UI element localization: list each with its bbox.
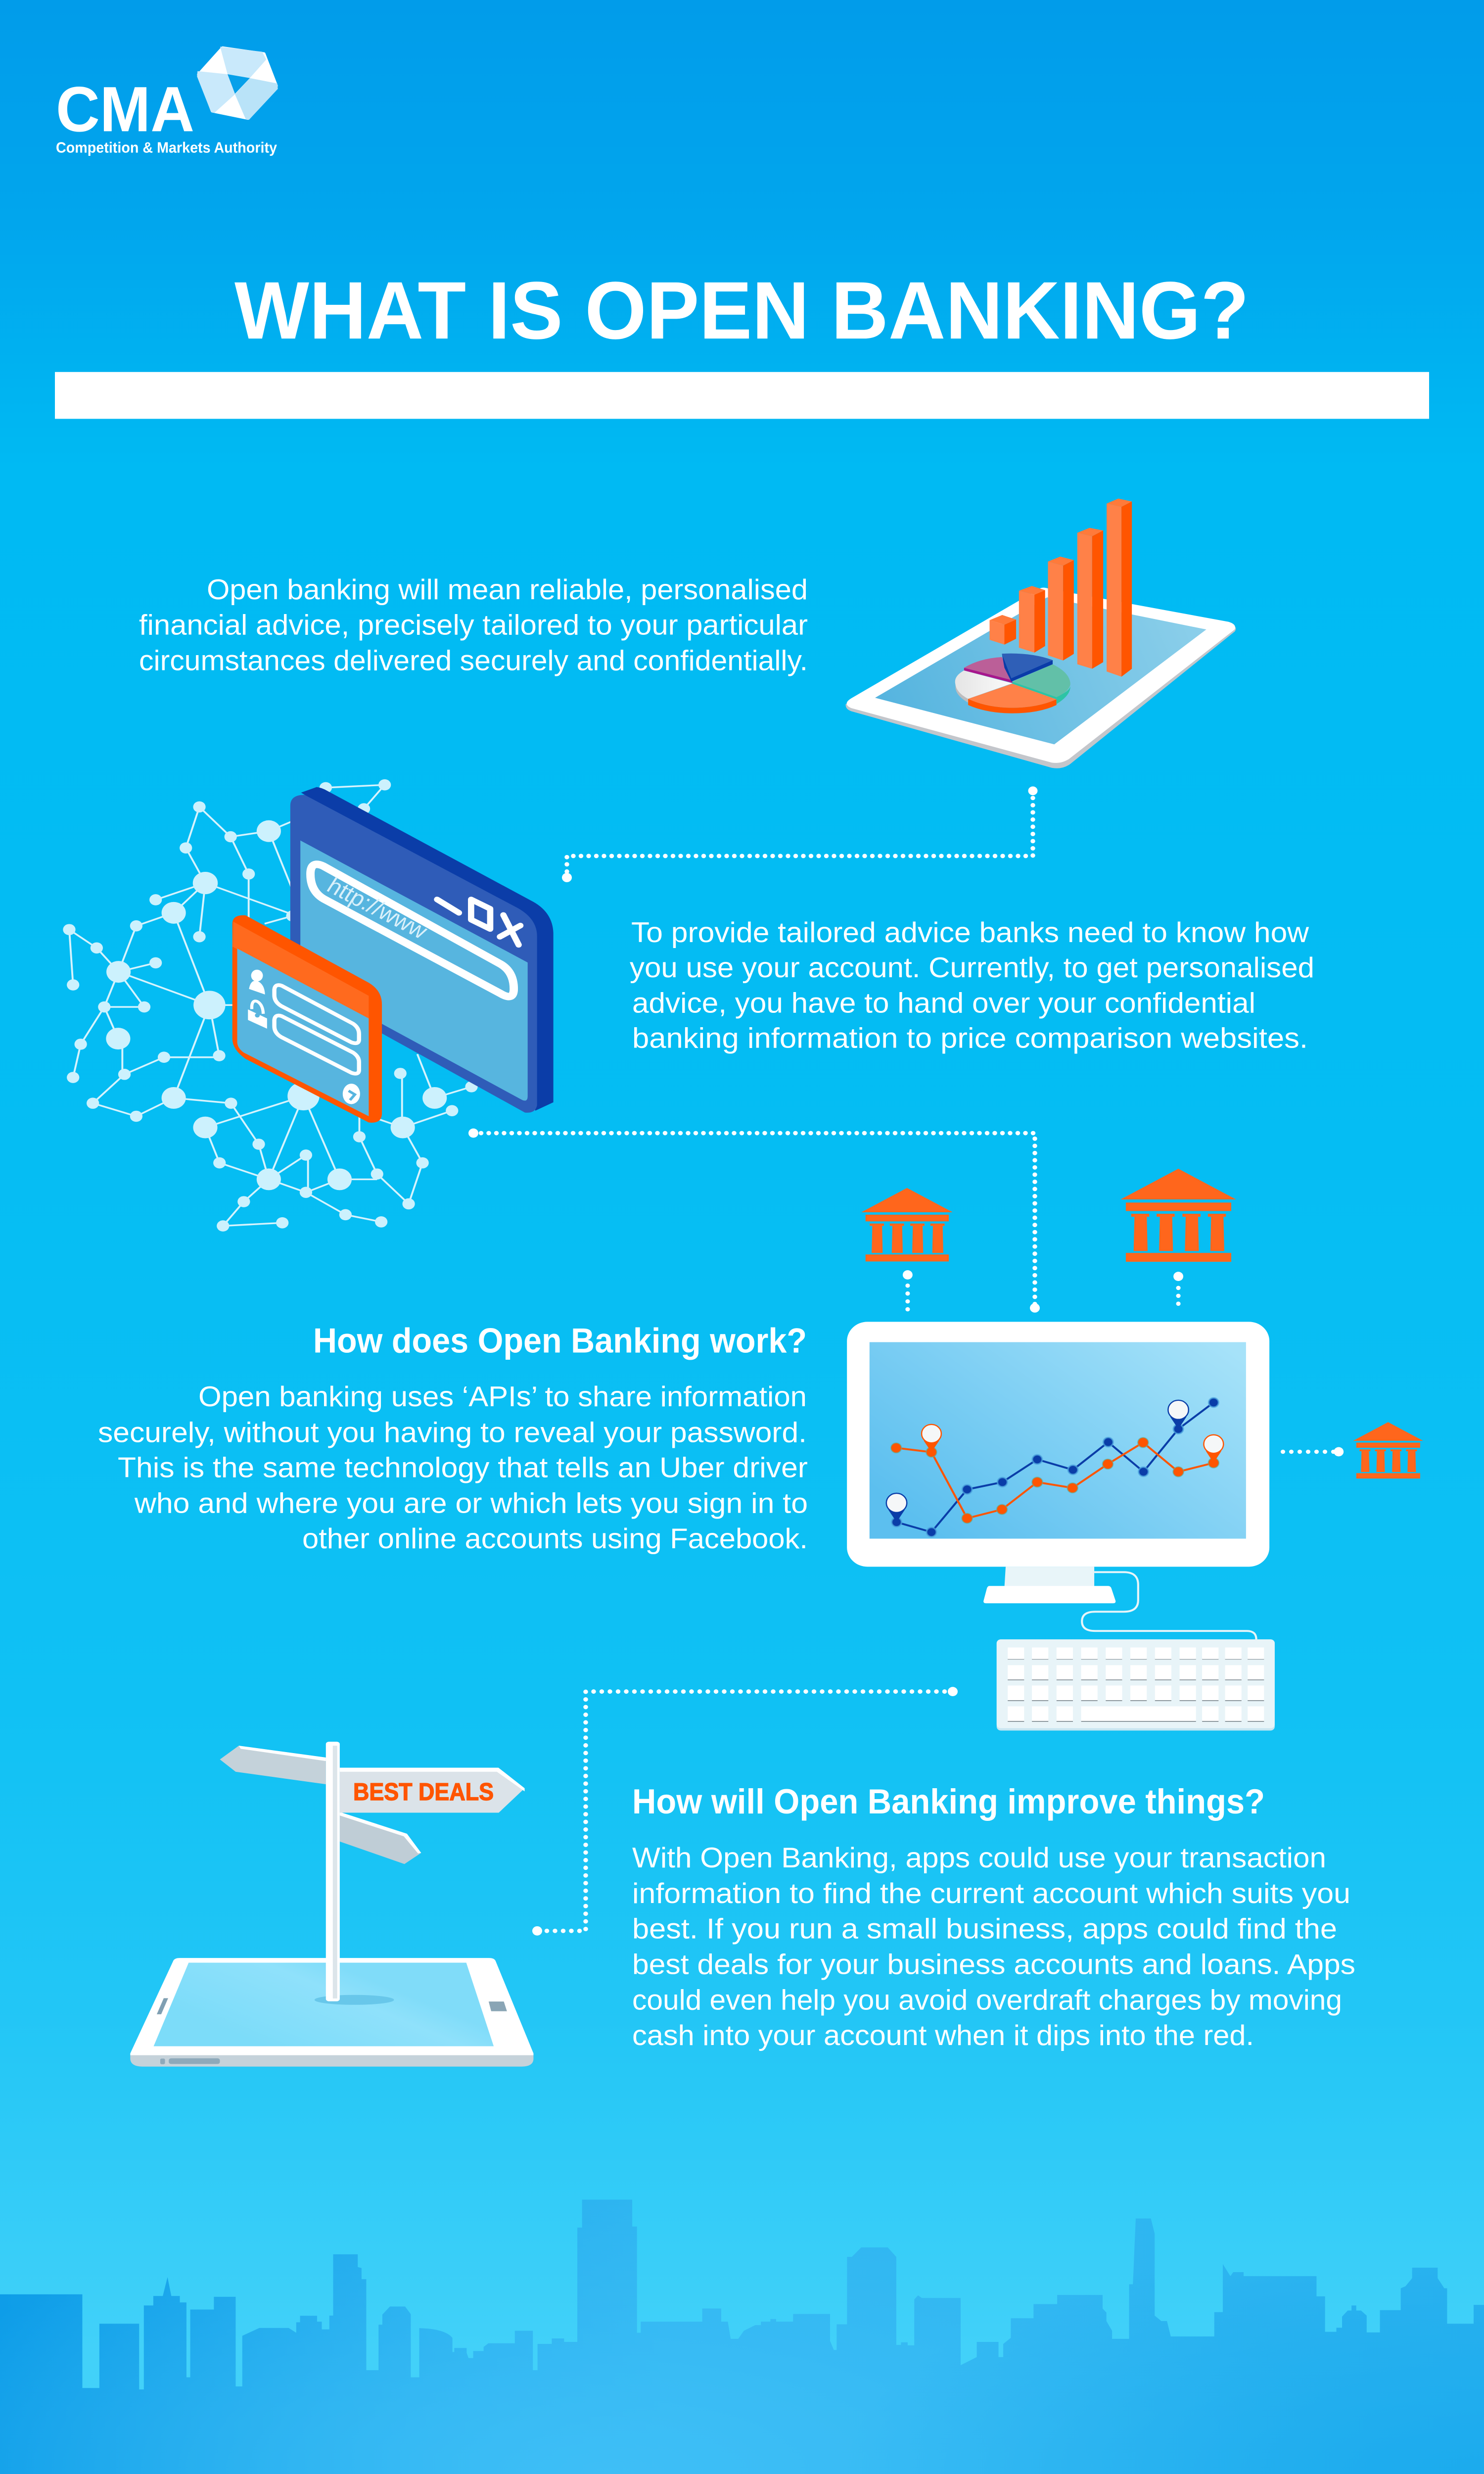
text block: tailored advice: advice, you have to hand over your confidential — [632, 987, 1255, 1019]
title: WHAT IS OPEN BANKING? — [234, 265, 1249, 356]
body copy: cash into your account when it dips into the red. — [632, 2019, 1254, 2051]
illustration: signpost on tablet — [130, 1742, 533, 2067]
keyboard cable — [1082, 1572, 1256, 1639]
text block: tailored advice — [630, 916, 1314, 1054]
post — [326, 1742, 340, 2001]
body copy: other online accounts using Facebook. — [302, 1522, 808, 1555]
heading: How does Open Banking work? — [313, 1322, 807, 1360]
tablet body — [846, 588, 1236, 768]
body copy: Open banking uses ‘APIs’ to share information — [198, 1380, 807, 1413]
address bar — [311, 864, 514, 997]
monitor — [847, 1322, 1269, 1603]
text block: how will open banking improve things — [632, 1782, 1355, 2051]
body copy — [632, 1842, 1355, 2051]
left sign — [220, 1746, 326, 1784]
orange login window — [232, 915, 382, 1123]
dotted connector: keyboard to signpost — [532, 1687, 958, 1936]
window controls — [437, 900, 520, 945]
body copy: information to find the current account which suits you — [632, 1877, 1350, 1909]
text block: tailored advice: you use your account. Currently, to get personalised — [630, 952, 1314, 984]
body copy — [98, 1380, 808, 1555]
dotted connector: tablet to browser — [562, 786, 1038, 882]
keyboard — [997, 1639, 1275, 1730]
illustration: network and browser windows — [63, 779, 554, 1232]
lock icon — [248, 1001, 267, 1029]
logo hexagon mark — [197, 47, 278, 120]
illustration: monitor, banks and keyboard — [847, 1169, 1423, 1730]
text block: tailored advice: banking information to price comparison websites. — [632, 1022, 1308, 1054]
body copy: best deals for your business accounts and loans. Apps — [632, 1948, 1355, 1980]
pie chart — [955, 654, 1070, 714]
dotted connector: browser to monitor — [468, 1129, 1040, 1313]
text block: tailored advice: To provide tailored advice banks need to know how — [631, 916, 1309, 948]
CMA logo — [56, 47, 278, 156]
body copy: With Open Banking, apps could use your transaction — [632, 1842, 1326, 1873]
url text: http://www — [323, 873, 432, 944]
logo subtitle: Competition & Markets Authority — [56, 139, 277, 156]
blue browser window — [290, 787, 554, 1113]
text block: how does open banking work — [98, 1322, 808, 1555]
dotted connectors to banks — [903, 1270, 1344, 1456]
text block: intro: circumstances delivered securely and confidentially. — [139, 644, 808, 676]
body copy: best. If you run a small business, apps could find the — [632, 1912, 1337, 1945]
white title bar — [55, 372, 1429, 419]
body copy: who and where you are or which lets you sign in to — [134, 1487, 808, 1519]
bar chart — [990, 499, 1132, 677]
line chart — [886, 1398, 1223, 1537]
text block: intro — [139, 573, 808, 676]
lower right sign — [340, 1812, 421, 1864]
location pins — [886, 1400, 1223, 1522]
text block: intro: Open banking will mean reliable, personalised — [207, 573, 808, 606]
best deals sign — [340, 1768, 525, 1812]
logo wordmark CMA: CMA — [56, 74, 194, 145]
bank icon centre — [1120, 1169, 1236, 1262]
city skyline silhouette — [0, 2200, 1484, 2474]
bank icon right — [1353, 1422, 1423, 1478]
network graph — [63, 779, 478, 1232]
input fields — [275, 985, 359, 1074]
tablet — [130, 1958, 533, 2067]
body copy: could even help you avoid overdraft charges by moving — [632, 1984, 1342, 2016]
illustration: tablet with bar and pie charts — [846, 499, 1236, 768]
body copy: securely, without you having to reveal your password. — [98, 1416, 807, 1448]
text block: intro: financial advice, precisely tailored to your particular — [139, 609, 808, 641]
submit button — [343, 1084, 360, 1104]
body copy: This is the same technology that tells an Uber driver — [118, 1451, 808, 1483]
heading: How will Open Banking improve things? — [632, 1782, 1265, 1821]
best deals label: BEST DEALS — [353, 1778, 494, 1806]
user icon — [249, 970, 265, 995]
bank icon left — [861, 1188, 953, 1261]
